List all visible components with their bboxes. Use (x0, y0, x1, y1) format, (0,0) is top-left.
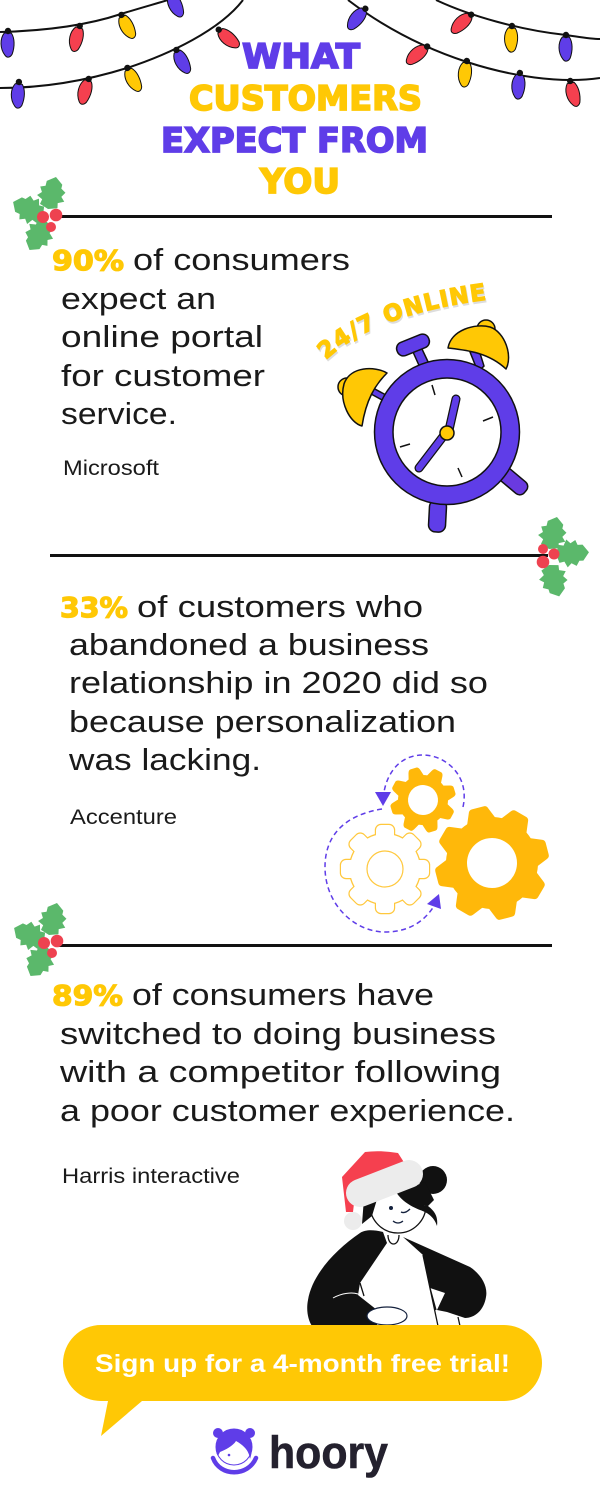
title: CUSTOMERS (189, 79, 422, 119)
holly 2 (535, 514, 590, 601)
illustration: woman with santa hat (307, 1151, 486, 1326)
stat 1 text: service. (61, 396, 177, 431)
dashed cycle arrows (325, 755, 464, 932)
holly 3 (8, 900, 71, 983)
title: YOU (259, 162, 340, 202)
source: Microsoft: Microsoft (63, 457, 159, 480)
outline gear (341, 825, 429, 913)
stat 3 text: switched to doing business (60, 1016, 496, 1051)
stat 3 text: a poor customer experience. (60, 1093, 515, 1128)
stat 1 text: of consumers (133, 242, 350, 277)
logo: hoory (213, 1427, 388, 1478)
logo wordmark: hoory (269, 1427, 388, 1478)
stat 2 text: of customers who (137, 589, 423, 624)
title: EXPECT FROM (161, 121, 428, 161)
24/7 online label: 24/7 ONLINE (316, 282, 486, 362)
string lights: left (0, 0, 243, 109)
icon: alarm clock (338, 320, 530, 532)
stat 1 text: 90% (52, 244, 124, 277)
stat 1 text: for customer (61, 358, 265, 393)
call to action bubble (63, 1325, 542, 1436)
stat 1 text: online portal (61, 319, 263, 354)
stat 2 text: abandoned a business (69, 627, 429, 662)
icon: gears (325, 755, 561, 932)
stat 2 text: because personalization (69, 704, 456, 739)
stat 1 text: expect an (61, 281, 216, 316)
stat 3 text: with a competitor following (59, 1054, 501, 1089)
stat 3 text (52, 977, 515, 1128)
large solid gear (423, 794, 561, 932)
stat 1 text (52, 242, 350, 431)
holly 1 (7, 174, 70, 257)
call to action bubble: Sign up for a 4-month free trial! (95, 1350, 510, 1378)
stat 2 text (60, 589, 488, 777)
small solid gear (382, 759, 464, 841)
stat 2 text: relationship in 2020 did so (69, 665, 488, 700)
title: WHAT (242, 37, 361, 77)
logo mark (213, 1428, 256, 1472)
string lights: right (343, 0, 600, 108)
stat 2 text: 33% (60, 591, 128, 624)
source: Harris interactive: Harris interactive (62, 1165, 240, 1188)
divider 3 (58, 944, 552, 947)
stat 2 text: was lacking. (68, 742, 261, 777)
stat 3 text: 89% (52, 979, 123, 1012)
source: Accenture: Accenture (70, 806, 177, 829)
title (161, 37, 428, 202)
divider 1 (56, 215, 552, 218)
stat 3 text: of consumers have (132, 977, 434, 1012)
divider 2 (50, 554, 548, 557)
